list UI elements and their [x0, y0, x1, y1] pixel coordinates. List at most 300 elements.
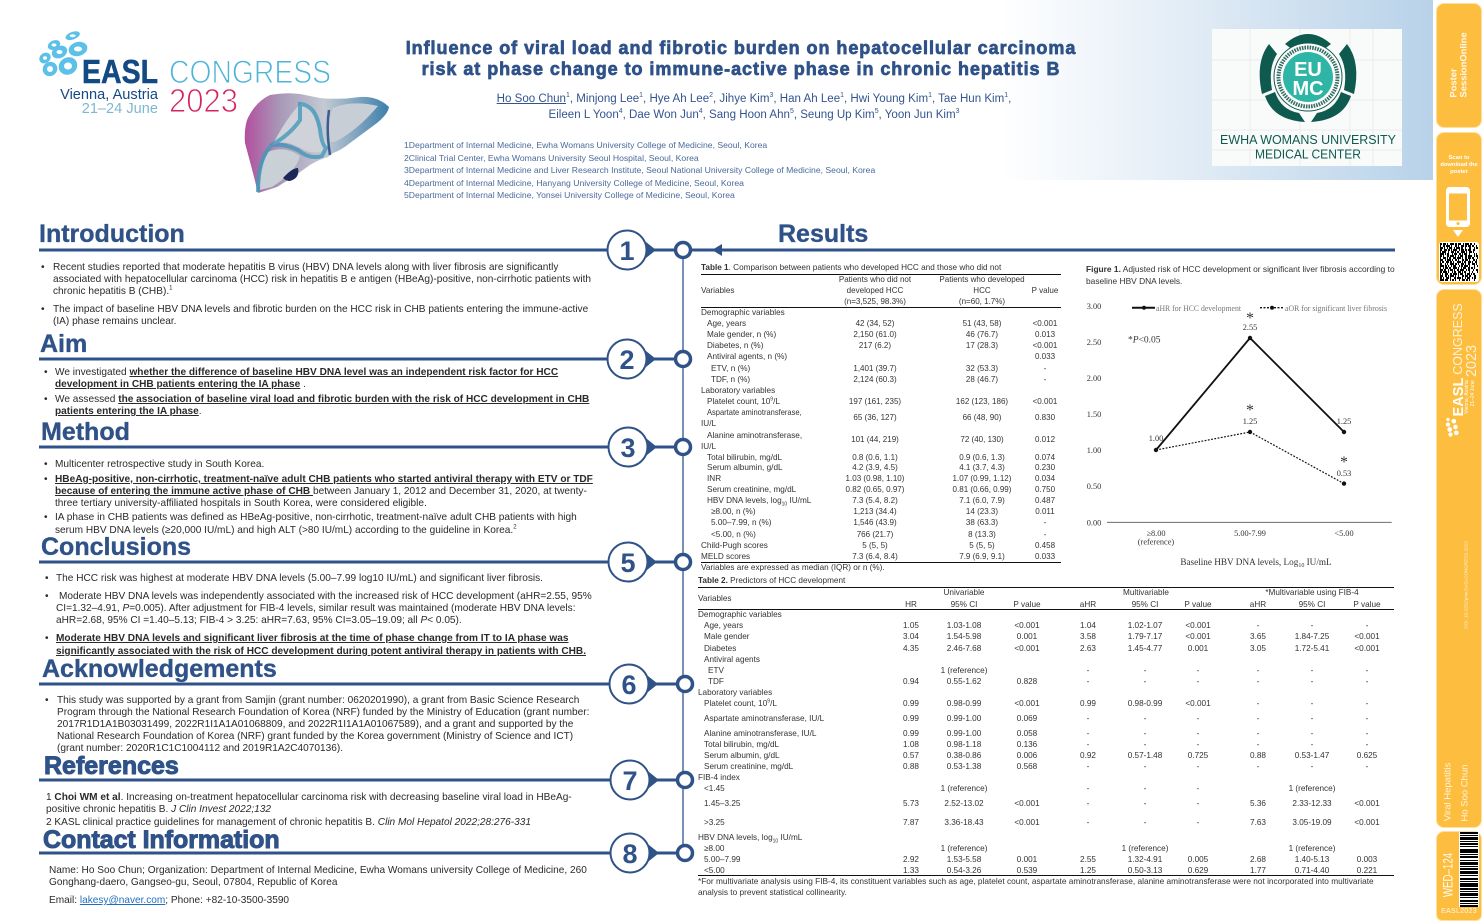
table 2: predictors of HCC development: aHR [1250, 600, 1266, 609]
table 2: predictors of HCC development: Diabetes [704, 644, 736, 653]
table 1: comparison between patients: (n=60, 1.7%) [959, 297, 1005, 306]
table 1: comparison between patients: - [1044, 530, 1046, 539]
table 1: comparison between patients: 1,213 (34.4) [853, 507, 897, 516]
table 2: predictors of HCC development: 1.72-5.41 [1295, 644, 1329, 653]
table 1: comparison between patients: Patients who did not [839, 275, 911, 284]
table 2: predictors of HCC development: - [1087, 714, 1089, 723]
EASL congress logo [39, 31, 331, 118]
sidebar panel: congress logo and poster info: EASL [1451, 378, 1467, 416]
table 2: predictors of HCC development: Total bilirubin, mg/dL [704, 740, 779, 749]
table 2: predictors of HCC development: - [1087, 740, 1089, 749]
table 2: predictors of HCC development: analysis to prevent statistical collinearity. [698, 887, 847, 897]
legend: aHR for HCC development [1156, 304, 1242, 313]
table 2: predictors of HCC development: - [1197, 740, 1199, 749]
table 2: predictors of HCC development: - [1257, 621, 1259, 630]
table 1: comparison between patients: 5 (5, 5) [862, 541, 888, 550]
table 2: predictors of HCC development: - [1257, 677, 1259, 686]
table 1: comparison between patients: Platelet count, 109/L [707, 396, 780, 406]
figure 1: adjusted risk line chart: 1.00 [1149, 434, 1163, 443]
text block: conclusions: Moderate HBV DNA levels and significant liver fibrosis at the time of phase change from IT to IA phase was [56, 633, 568, 644]
text block: references: positive chronic hepatitis B. J Clin Invest 2022;132 [46, 804, 271, 815]
table 1: comparison between patients: MELD scores [701, 552, 750, 561]
table 1: comparison between patients: TDF, n (%) [711, 375, 750, 384]
table 2: predictors of HCC development: 1.45-4.77 [1128, 644, 1162, 653]
text block: conclusions: • [45, 633, 49, 644]
table 2: predictors of HCC development: 0.99 [903, 699, 919, 708]
text block: aim: development in CHB patients entering the IA phase . [55, 379, 306, 390]
figure 1: adjusted risk line chart: 2.55 [1243, 323, 1257, 332]
table 2: predictors of HCC development: 0.98-1.18 [947, 740, 981, 749]
step marker 5: 5 [620, 548, 636, 578]
table 2: predictors of HCC development: - [1257, 729, 1259, 738]
icon: EASL hexagons [1446, 418, 1459, 437]
table 2: predictors of HCC development: - [1366, 762, 1368, 771]
affiliations: 4Department of Internal Medicine, Hanyang University College of Medicine, Seoul, Korea [404, 178, 744, 188]
table 2: predictors of HCC development: <0.001 [1354, 632, 1380, 641]
table 2: predictors of HCC development: 0.828 [1017, 677, 1037, 686]
figure 1: adjusted risk line chart: Baseline HBV DNA levels, Log [1180, 557, 1298, 567]
sidebar panel: poster number and barcode [1436, 831, 1482, 921]
affiliations: 2Clinical Trial Center, Ewha Womans University Seoul Hospital, Seoul, Korea [404, 153, 699, 163]
table 2: predictors of HCC development: 1.03-1.08 [947, 621, 981, 630]
table 2: predictors of HCC development: 0.001 [1188, 644, 1208, 653]
sidebar panel: scan to download [1436, 132, 1482, 285]
figure 1: adjusted risk line chart: 1.50 [1087, 410, 1101, 419]
text block: conclusions: • [45, 591, 49, 602]
text block: method: • [44, 474, 48, 485]
step marker 3 [608, 426, 692, 468]
EASL congress logo: EASL [82, 53, 158, 90]
table 1: comparison between patients: 0.9 (0.6, 1.3) [959, 453, 1005, 462]
text block: method [44, 459, 593, 536]
figure 1: adjusted risk line chart: 5.00-7.99 [1234, 529, 1266, 538]
table 2: predictors of HCC development: 1 (reference) [1289, 784, 1335, 793]
text block: aim [44, 367, 590, 417]
text block: introduction: chronic hepatitis B (CHB).1 [53, 286, 172, 297]
step marker 3: 3 [620, 433, 636, 463]
table 2: predictors of HCC development: Antiviral agents [704, 655, 760, 664]
text block: contact information: Email: lakesy@naver.com; Phone: +82-10-3500-3590 [49, 895, 289, 906]
aOR line [1154, 430, 1346, 486]
table 2: predictors of HCC development: - [1366, 740, 1368, 749]
heading: Conclusions: Conclusions [41, 533, 191, 561]
table 1: comparison between patients: 0.750 [1035, 485, 1055, 494]
table 2: predictors of HCC development: 2.63 [1080, 644, 1096, 653]
figure 1: adjusted risk line chart: 0.50 [1087, 482, 1101, 491]
table 2: predictors of HCC development: <0.001 [1185, 621, 1211, 630]
table 2: predictors of HCC development: 0.629 [1188, 866, 1208, 875]
table 1: comparison between patients: HBV DNA levels, log10 IU/mL [707, 496, 811, 508]
table 2: predictors of HCC development: >3.25 [704, 818, 725, 827]
table 1: comparison between patients: Antiviral agents, n (%) [707, 352, 787, 361]
step marker 2: 2 [619, 345, 635, 375]
table 2: predictors of HCC development: HBV DNA levels, log10 IU/mL [698, 833, 802, 845]
table 2: predictors of HCC development: Demographic variables [698, 610, 782, 619]
table 2: predictors of HCC development: 1.45–3.25 [704, 799, 740, 808]
table 1: comparison between patients: 0.033 [1035, 352, 1055, 361]
scan caption: download the [1440, 162, 1478, 168]
table 2: predictors of HCC development: 95% CI [951, 600, 977, 609]
text block: acknowledgements: Program through the National Research Foundation of Korea (NRF) funded by the Ministry of Education (grant number: [57, 707, 589, 718]
table 2: predictors of HCC development: 5.00–7.99 [704, 855, 740, 864]
sidebar panel: congress logo and poster info: CONGRESS [1451, 303, 1465, 375]
table 1: comparison between patients: Table 1. Comparison between patients who developed HCC and those who did not [701, 263, 1001, 272]
table 2: predictors of HCC development: 0.99-1.00 [947, 714, 981, 723]
table 2: predictors of HCC development: <0.001 [1014, 644, 1040, 653]
table 2: predictors of HCC development: 0.54-3.26 [947, 866, 981, 875]
table 2: predictors of HCC development: 4.35 [903, 644, 919, 653]
table 2: predictors of HCC development: 0.71-4.40 [1295, 866, 1329, 875]
figure 1: adjusted risk line chart: 1.00 [1087, 446, 1101, 455]
icon: liver illustration [244, 93, 389, 193]
table 2: predictors of HCC development: 0.539 [1017, 866, 1037, 875]
text block: conclusions: significantly associated with the risk of HCC development during potent antiviral therapy in patients with CHB. [56, 646, 586, 657]
legend [1132, 304, 1387, 313]
text block: acknowledgements: National Research Foundation of Korea (NRF) grant funded by the Korea government (Ministry of Science and ICT) [57, 731, 573, 742]
text block: acknowledgements: (grant number: 2020R1C1C1004112 and 2019R1A2C4070136). [57, 743, 343, 754]
table 1: comparison between patients: Laboratory variables [701, 386, 775, 395]
table 2: predictors of HCC development: - [1311, 621, 1313, 630]
table 2: predictors of HCC development: - [1366, 714, 1368, 723]
text block: method: • [44, 459, 48, 470]
step marker 6: 6 [621, 670, 637, 700]
table 2: predictors of HCC development: <0.001 [1185, 632, 1211, 641]
figure 1: adjusted risk line chart: * [1246, 402, 1254, 419]
table 2: predictors of HCC development: 0.57 [903, 751, 919, 760]
table 2: predictors of HCC development: - [1144, 714, 1146, 723]
EASL congress logo: 21–24 June [82, 101, 158, 117]
table 1: comparison between patients: 0.8 (0.6, 1.1) [852, 453, 898, 462]
table 2: predictors of HCC development: 1 (reference) [941, 844, 987, 853]
sidebar panel: congress logo and poster info [1436, 289, 1482, 828]
table 2: predictors of HCC development: 3.04 [903, 632, 919, 641]
table 1: comparison between patients: Male gender, n (%) [707, 330, 776, 339]
table 2: predictors of HCC development: - [1257, 740, 1259, 749]
table 2: predictors of HCC development: FIB-4 index [698, 773, 740, 782]
table 2: predictors of HCC development: - [1144, 784, 1146, 793]
table 1: comparison between patients: <0.001 [1033, 397, 1057, 406]
table 2: predictors of HCC development: 0.50-3.13 [1128, 866, 1162, 875]
barcode [1459, 832, 1479, 907]
text block: introduction: The impact of baseline HBV DNA levels and fibrotic burden on the HCC risk in CHB patients entering the immune-active [53, 304, 588, 315]
heading: Acknowledgements: Acknowledgements [42, 655, 277, 683]
table 2: predictors of HCC development: - [1197, 818, 1199, 827]
title: risk at phase change to immune-active phase in chronic hepatitis B [422, 59, 1060, 79]
table 2: predictors of HCC development: - [1366, 621, 1368, 630]
affiliations: 1Department of Internal Medicine, Ewha Womans University College of Medicine, Seoul, Korea [404, 140, 767, 150]
table 2: predictors of HCC development: Multivariable [1123, 588, 1169, 597]
table 2: predictors of HCC development: 1.02-1.07 [1128, 621, 1162, 630]
table 1: comparison between patients: 51 (43, 58) [963, 319, 1001, 328]
table 2: predictors of HCC development: 0.058 [1017, 729, 1037, 738]
text block: references: 1 Choi WM et al. Increasing on-treatment hepatocellular carcinoma risk with decreasing baseline viral load in HBeAg- [46, 792, 572, 803]
table 1: comparison between patients: 162 (123, 186) [956, 397, 1008, 406]
table 2: predictors of HCC development: 0.98-0.99 [947, 699, 981, 708]
text block: method: because of entering the immune active phase of CHB between January 1, 2012 and December 31, 2020, at twenty- [55, 486, 587, 497]
figure 1: adjusted risk line chart: 1.25 [1243, 417, 1257, 426]
table 1: comparison between patients: 5 (5, 5) [969, 541, 995, 550]
sidebar panel: poster session online [1436, 3, 1482, 128]
affiliations: 5Department of Internal Medicine, Yonsei University College of Medicine, Seoul, Korea [404, 190, 735, 200]
sidebar panel: congress logo and poster info: 21–24 June [1470, 380, 1476, 406]
table 2: predictors of HCC development: 0.625 [1357, 751, 1377, 760]
table 2: predictors of HCC development: <0.001 [1354, 799, 1380, 808]
table 2: predictors of HCC development: 0.99 [903, 729, 919, 738]
figure 1: adjusted risk line chart: baseline HBV DNA levels. [1086, 276, 1182, 286]
table 1: comparison between patients: 0.074 [1035, 453, 1055, 462]
heading: Method: Method [41, 418, 130, 446]
table 2: predictors of HCC development: <0.001 [1014, 818, 1040, 827]
table 1: comparison between patients: Diabetes, n (%) [707, 341, 763, 350]
sidebar panel: congress logo and poster info: Vienna, Austria [1464, 380, 1470, 414]
text block: contact information: Name: Ho Soo Chun; Organization: Department of Internal Medicine, Ewha Womans university College of Medicine, 260 [49, 865, 587, 876]
table 2: predictors of HCC development: HR [905, 600, 917, 609]
table 1: comparison between patients: IU/L [701, 442, 716, 451]
table 2: predictors of HCC development: Platelet count, 109/L [704, 698, 777, 708]
table 2: predictors of HCC development: - [1144, 666, 1146, 675]
table 2: predictors of HCC development: - [1087, 729, 1089, 738]
table 1: comparison between patients: 1,546 (43.9) [853, 518, 897, 527]
figure 1: adjusted risk line chart: IU/mL [1304, 557, 1332, 567]
table 1: comparison between patients: - [1044, 364, 1046, 373]
table 2: predictors of HCC development: Univariable [944, 588, 984, 597]
logo: Ewha Womans University Medical Center: MEDICAL CENTER [1255, 146, 1361, 162]
logo: Ewha Womans University Medical Center: EWHA WOMANS UNIVERSITY [1220, 132, 1396, 147]
table 2: predictors of HCC development: 1.77 [1250, 866, 1266, 875]
table 2: predictors of HCC development: 0.99-1.00 [947, 729, 981, 738]
table 2: predictors of HCC development: - [1144, 818, 1146, 827]
table 2: predictors of HCC development: 1.79-7.17 [1128, 632, 1162, 641]
table 2: predictors of HCC development: - [1311, 714, 1313, 723]
table 1: comparison between patients: 42 (34, 52) [856, 319, 894, 328]
table 2: predictors of HCC development: 0.88 [1250, 751, 1266, 760]
table 1: comparison between patients: <0.001 [1033, 341, 1057, 350]
table 2: predictors of HCC development: Laboratory variables [698, 688, 772, 697]
table 1: comparison between patients: Serum albumin, g/dL [707, 463, 783, 472]
table 2: predictors of HCC development: - [1197, 799, 1199, 808]
table 2: predictors of HCC development: 1.08 [903, 740, 919, 749]
section connector line [39, 244, 1395, 854]
title: Influence of viral load and fibrotic burden on hepatocellular carcinoma [406, 38, 1076, 58]
table 1: comparison between patients: Variables are expressed as median (IQR) or n (%). [701, 563, 885, 572]
table 1: comparison between patients: Alanine aminotransferase, [707, 431, 802, 440]
table 1: comparison between patients: 0.011 [1035, 507, 1055, 516]
step marker 7 [610, 760, 694, 800]
table 2: predictors of HCC development: - [1311, 762, 1313, 771]
text block: conclusions: aHR=2.68, 95% CI =1.40–5.13; FIB-4 > 3.25: aHR=7.63, 95% CI=3.05–19.09; all P< 0.05). [56, 615, 462, 626]
EASL congress logo: Vienna, Austria [60, 87, 159, 103]
table 1: comparison between patients: 0.82 (0.65, 0.97) [846, 485, 904, 494]
table 1: comparison between patients: ≥8.00, n (%) [711, 507, 756, 516]
table 2: predictors of HCC development: 0.006 [1017, 751, 1037, 760]
table 2: predictors of HCC development: 0.57-1.48 [1128, 751, 1162, 760]
table 1: comparison between patients: <5.00, n (%) [711, 530, 756, 539]
table 2: predictors of HCC development: - [1311, 677, 1313, 686]
heading: Contact Information: Contact Information [43, 826, 280, 854]
table 2: predictors of HCC development: Serum albumin, g/dL [704, 751, 780, 760]
table 1: comparison between patients: developed HCC [847, 286, 903, 295]
table 2: predictors of HCC development: 5.73 [903, 799, 919, 808]
table 1: comparison between patients: 0.487 [1035, 496, 1055, 505]
table 2: predictors of HCC development: 0.069 [1017, 714, 1037, 723]
logo: Ewha Womans University Medical Center: EU [1294, 59, 1322, 81]
text block: introduction: associated with hepatocellular carcinoma (HCC) risk in hepatitis B e antigen (HBeAg)-positive, non-cirrhotic patients with [53, 274, 591, 285]
text block: acknowledgements: This study was supported by a grant from Samjin (grant number: 0620201990), a grant from Basic Science Research [57, 695, 579, 706]
logo: Ewha Womans University Medical Center: MC [1292, 78, 1324, 100]
table 1: comparison between patients: INR [707, 474, 721, 483]
table 2: predictors of HCC development: 1.33 [903, 866, 919, 875]
table 1: comparison between patients: Child-Pugh scores [701, 541, 768, 550]
table 1: comparison between patients: 46 (76.7) [966, 330, 998, 339]
table 1: comparison between patients [701, 263, 1061, 572]
table 1: comparison between patients: HCC [973, 286, 991, 295]
table 2: predictors of HCC development: 0.725 [1188, 751, 1208, 760]
table 2: predictors of HCC development: 0.38-0.86 [947, 751, 981, 760]
table 2: predictors of HCC development: - [1087, 799, 1089, 808]
table 2: predictors of HCC development: Age, years [704, 621, 743, 630]
authors: Eileen L Yoon4, Dae Won Jun4, Sang Hoon Ahn5, Seung Up Kim5, Yoon Jun Kim3 [549, 108, 959, 121]
table 1: comparison between patients: 101 (44, 219) [851, 435, 899, 444]
figure 1: adjusted risk line chart: <5.00 [1334, 529, 1354, 538]
text block: introduction: (IA) phase remains unclear. [53, 316, 176, 327]
table 2: predictors of HCC development: P value [1013, 600, 1041, 609]
table 1: comparison between patients: 0.830 [1035, 413, 1055, 422]
text block: aim: • [44, 394, 48, 405]
figure 1: adjusted risk line chart: 3.00 [1087, 302, 1101, 311]
table 1: comparison between patients: 1,401 (39.7) [853, 364, 897, 373]
figure 1: adjusted risk line chart: *P<0.05 [1128, 336, 1161, 346]
EASL congress logo: 2023 [169, 82, 238, 118]
table 2: predictors of HCC development: 3.58 [1080, 632, 1096, 641]
table 2: predictors of HCC development: - [1144, 799, 1146, 808]
table 2: predictors of HCC development: - [1197, 784, 1199, 793]
text block: method: IA phase in CHB patients was defined as HBeAg-positive, non-cirrhotic, treatment-naïve adult CHB patients with high [55, 512, 577, 523]
authors [496, 92, 1011, 121]
table 2: predictors of HCC development [698, 576, 1394, 897]
table 1: comparison between patients: 0.230 [1035, 463, 1055, 472]
table 1: comparison between patients: Aspartate aminotransferase, [707, 408, 802, 417]
table 2: predictors of HCC development: aHR [1080, 600, 1096, 609]
sidebar panel: poster session online: Poster [1448, 68, 1458, 98]
step marker 2 [606, 338, 692, 380]
table 2: predictors of HCC development: - [1311, 740, 1313, 749]
table 1: comparison between patients: Total bilirubin, mg/dL [707, 453, 782, 462]
text block: conclusions [45, 573, 592, 657]
table 2: predictors of HCC development: - [1197, 677, 1199, 686]
table 2: predictors of HCC development: 1.40-5.13 [1295, 855, 1329, 864]
sidebar panel: congress logo and poster info: Ho Soo Chun [1460, 764, 1470, 822]
table 2: predictors of HCC development: 2.46-7.68 [947, 644, 981, 653]
text block: aim: We investigated whether the difference of baseline HBV DNA level was an independent risk factor for HCC [55, 367, 558, 378]
table 2: predictors of HCC development: TDF [708, 677, 724, 686]
table 1: comparison between patients: - [1044, 375, 1046, 384]
text block: aim: patients entering the IA phase. [55, 406, 202, 417]
text block: introduction: Recent studies reported that moderate hepatitis B virus (HBV) DNA levels along with liver fibrosis are significantly [53, 262, 558, 273]
table 1: comparison between patients: 5.00–7.99, n (%) [711, 518, 772, 527]
text block: conclusions: Moderate HBV DNA levels was independently associated with the increased risk of HCC development (aHR=2.55, 95% [59, 591, 592, 602]
figure 1: adjusted risk line chart: 0.00 [1087, 518, 1101, 528]
table 2: predictors of HCC development: Aspartate aminotransferase, IU/L [704, 714, 824, 723]
table 1: comparison between patients: 0.458 [1035, 541, 1055, 550]
text block: method: • [44, 512, 48, 523]
table 1: comparison between patients: ETV, n (%) [711, 364, 750, 373]
table 2: predictors of HCC development: 1.04 [1080, 621, 1096, 630]
table 2: predictors of HCC development: 1.53-5.58 [947, 855, 981, 864]
step marker 8: 8 [622, 839, 638, 869]
text block: method: Multicenter retrospective study in South Korea. [55, 459, 264, 470]
heading: Aim: Aim [40, 330, 87, 358]
step marker 5 [608, 542, 692, 582]
affiliations [404, 140, 876, 200]
figure 1: adjusted risk line chart: * [1340, 454, 1348, 471]
table 2: predictors of HCC development: <0.001 [1014, 621, 1040, 630]
scan caption [1440, 155, 1478, 175]
text block: acknowledgements: 2017R1D1A1B03031499, 2022R1I1A1A01068809, and 2022R1I1A1A01067589), and a grant and supported by the [57, 719, 573, 730]
table 2: predictors of HCC development: - [1311, 666, 1313, 675]
table 1: comparison between patients: 1.07 (0.99, 1.12) [953, 474, 1011, 483]
table 2: predictors of HCC development: 1.25 [1080, 866, 1096, 875]
logo: Ewha Womans University Medical Center [1212, 29, 1402, 166]
table 2: predictors of HCC development: ETV [708, 666, 724, 675]
table 1: comparison between patients: IU/L [701, 419, 716, 428]
table 2: predictors of HCC development: - [1087, 666, 1089, 675]
figure 1: adjusted risk line chart: 10 [1298, 563, 1304, 569]
table 2: predictors of HCC development: 0.99 [1080, 699, 1096, 708]
table 2: predictors of HCC development: - [1087, 784, 1089, 793]
table 2: predictors of HCC development: ≥8.00 [704, 844, 724, 853]
text block: method: three tertiary university-affiliated hospitals in South Korea, were considered eligible. [55, 498, 427, 509]
table 2: predictors of HCC development: - [1311, 729, 1313, 738]
scan caption: Scan to [1449, 155, 1469, 161]
table 2: predictors of HCC development: 2.68 [1250, 855, 1266, 864]
sidebar panel: congress logo and poster info: DOI: 10.3252/pnw.EASLCONGRESS.2023 [1464, 541, 1468, 629]
figure 1: adjusted risk line chart: Figure 1. Adjusted risk of HCC development or significant liver fibrosis according to [1086, 264, 1395, 274]
table 2: predictors of HCC development: - [1366, 666, 1368, 675]
table 1: comparison between patients: 72 (40, 130) [960, 435, 1004, 444]
table 2: predictors of HCC development: 2.92 [903, 855, 919, 864]
table 1: comparison between patients: Serum creatinine, mg/dL [707, 485, 796, 494]
figure 1: adjusted risk line chart: 1.25 [1337, 417, 1351, 426]
text block: aim: • [44, 367, 48, 378]
table 1: comparison between patients: Variables [701, 286, 735, 295]
table 2: predictors of HCC development: P value [1184, 600, 1212, 609]
table 2: predictors of HCC development: - [1257, 714, 1259, 723]
table 2: predictors of HCC development: Alanine aminotransferase, IU/L [704, 729, 816, 738]
step marker 6 [608, 664, 694, 704]
table 1: comparison between patients: 7.3 (5.4, 8.2) [852, 496, 898, 505]
step marker 7: 7 [622, 766, 638, 796]
table 2: predictors of HCC development: 7.87 [903, 818, 919, 827]
text block: contact information: Gonghang-daero, Gangseo-gu, Seoul, 07804, Republic of Korea [49, 877, 337, 888]
table 1: comparison between patients: 17 (28.3) [966, 341, 998, 350]
table 2: predictors of HCC development: <0.001 [1185, 699, 1211, 708]
table 2: predictors of HCC development: <0.001 [1014, 799, 1040, 808]
table 1: comparison between patients: 197 (161, 235) [849, 397, 901, 406]
heading: Results: Results [778, 220, 868, 248]
table 2: predictors of HCC development: - [1197, 714, 1199, 723]
table 1: comparison between patients: 0.81 (0.66, 0.99) [953, 485, 1011, 494]
table 2: predictors of HCC development: 1.05 [903, 621, 919, 630]
step marker 8 [610, 832, 694, 874]
text block: contact information [49, 865, 587, 906]
table 2: predictors of HCC development: 3.65 [1250, 632, 1266, 641]
table 2: predictors of HCC development: <0.001 [1354, 818, 1380, 827]
table 1: comparison between patients: 0.012 [1035, 435, 1055, 444]
title [406, 38, 1076, 80]
table 1: comparison between patients: 0.034 [1035, 474, 1055, 483]
table 2: predictors of HCC development: P value [1353, 600, 1381, 609]
sidebar panel: congress logo and poster info: 2023 [1464, 345, 1480, 377]
